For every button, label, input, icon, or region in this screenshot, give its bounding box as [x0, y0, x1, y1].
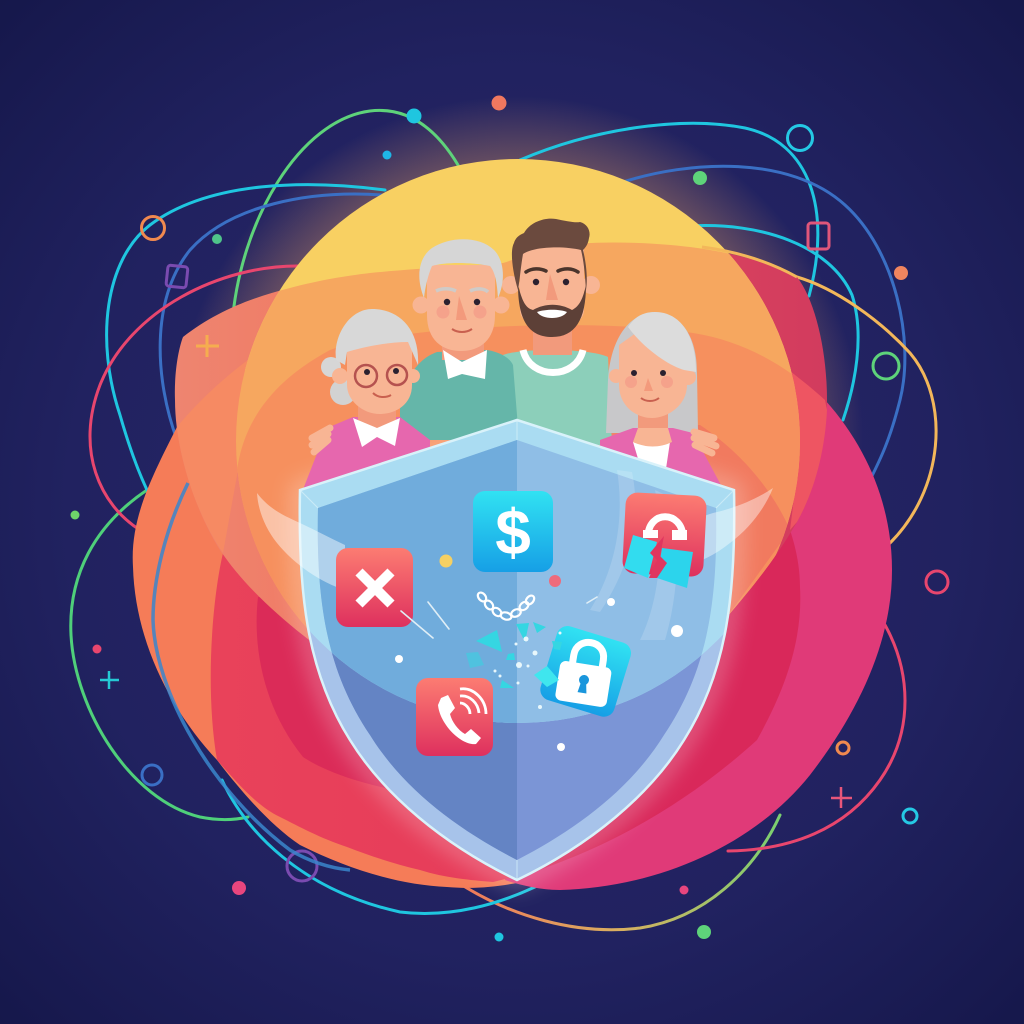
right overlap of top blob [780, 363, 827, 530]
woman with long grey hair [600, 312, 722, 500]
lower-left blue line over blob [153, 483, 350, 870]
plus markers [100, 671, 852, 808]
overlapping colour blobs [133, 150, 892, 890]
orbit lines [71, 110, 936, 930]
icon: broken phone tile [622, 492, 707, 588]
coloured and white dots [395, 554, 683, 751]
shield body lower [318, 440, 716, 860]
icon: padlock tile [538, 623, 634, 719]
left light crescent [257, 493, 345, 590]
central red blob [211, 400, 800, 882]
older man [400, 239, 519, 440]
shield [257, 420, 773, 880]
white specks [494, 632, 562, 709]
shield outline [300, 420, 734, 880]
shattered fragments [395, 554, 683, 751]
left orange blob [133, 380, 560, 888]
shield top ridge [300, 420, 734, 880]
ring markers [142, 126, 948, 881]
top-right gold line over blob [702, 247, 797, 277]
motion lines [401, 597, 597, 638]
icon: phone tile [416, 678, 493, 756]
glass streaks [590, 470, 677, 640]
plus marker over blob [196, 335, 219, 357]
white halo around shield [300, 420, 734, 880]
icon: rejected X tile [336, 548, 413, 627]
older woman with glasses [302, 309, 430, 500]
family group [302, 219, 722, 500]
top blob [175, 242, 827, 702]
shield rim lower [300, 420, 734, 880]
dot markers [70, 96, 908, 942]
floating decorations [70, 96, 948, 942]
cyan shards [466, 622, 562, 688]
left overlap of top blob [177, 350, 262, 553]
square markers [166, 223, 829, 288]
sun overlap bands [236, 242, 800, 628]
shield left facet lower [332, 652, 517, 860]
icon: dollar tile [473, 491, 553, 572]
man with beard [502, 219, 612, 445]
right light crescent [685, 488, 773, 566]
glow behind sun circle [173, 96, 863, 786]
icon: dollar tile: $ [495, 496, 531, 568]
right pink blob [505, 330, 892, 890]
upper part inside sun circle [301, 422, 733, 723]
sun circle [236, 159, 800, 628]
broken chain [476, 591, 536, 621]
crimson inner fold [257, 597, 430, 795]
